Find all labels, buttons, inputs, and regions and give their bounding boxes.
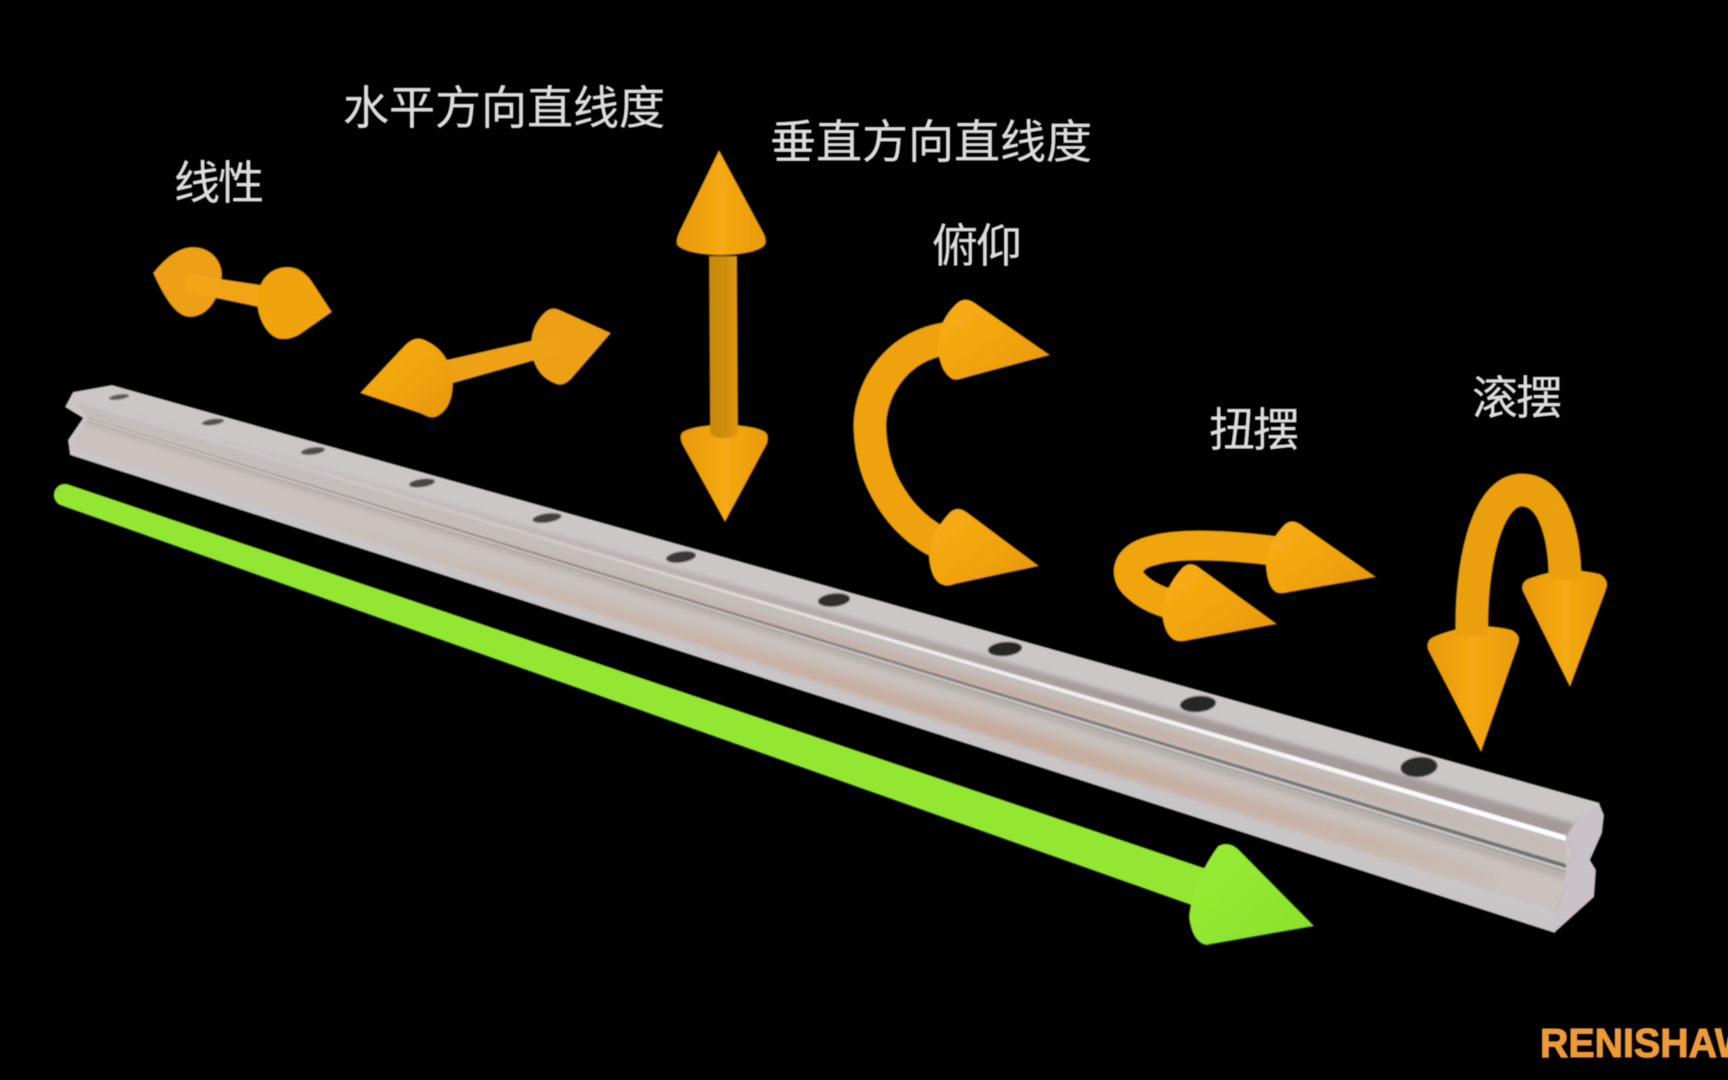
soft dark shade below groove: [87, 421, 1566, 880]
warm reflection on lower side: [458, 564, 1480, 878]
linear guide rail: [65, 385, 1604, 933]
rear cone disc: [531, 308, 611, 385]
front cone: [360, 338, 453, 418]
rail body shading: [68, 398, 1576, 933]
orange arrow: pitch: [870, 300, 1050, 586]
orange arrow: yaw: [1129, 521, 1376, 641]
upper cone: [938, 300, 1050, 380]
rail mounting holes: [109, 393, 1438, 779]
band warm shading above groove: [489, 541, 1436, 816]
green arrow shaft: [54, 484, 1210, 908]
rail highlight line: [75, 400, 1566, 841]
rear cone disc: [153, 247, 222, 317]
shaft: [709, 256, 738, 438]
curved shaft: [870, 338, 950, 542]
orange arrow: horizontal straightness: [360, 308, 611, 418]
label: vertical straightness: 垂直方向直线度: [770, 116, 1092, 168]
lower cone: [929, 509, 1039, 586]
rear cone: [1266, 521, 1376, 593]
bottom cone: [680, 425, 768, 522]
rail groove line: [87, 417, 1566, 868]
rail end face: [1554, 803, 1604, 933]
green arrow head: [1189, 844, 1314, 945]
orange arrow: linear: [153, 247, 332, 339]
green direction arrow: [54, 484, 1314, 945]
front cone: [1162, 564, 1277, 641]
label: pitch: 俯仰: [932, 220, 1022, 272]
label: horizontal straightness: 水平方向直线度: [343, 82, 665, 134]
light strip at bottom edge: [406, 556, 1181, 800]
front cone: [257, 267, 332, 339]
shaft: [446, 335, 559, 384]
curved shaft: [1129, 546, 1275, 606]
orange arrow: vertical straightness: [676, 150, 768, 522]
orange arrow: roll: [1427, 490, 1607, 752]
shaft: [185, 274, 262, 307]
band between highlight and groove: [75, 402, 1566, 866]
band below groove: [70, 420, 1566, 912]
top cone: [676, 150, 766, 255]
rear cone: [1522, 570, 1607, 687]
shaded channel under shoulder: [331, 472, 1574, 836]
rail upper flat surface: [65, 385, 1600, 933]
label: yaw: 扭摆: [1209, 404, 1299, 456]
label: roll: 滚摆: [1472, 372, 1562, 424]
rail second groove line: [87, 421, 1566, 872]
label: linearity: 线性: [174, 157, 264, 209]
front cone: [1427, 626, 1519, 752]
curved shaft: [1472, 490, 1565, 636]
